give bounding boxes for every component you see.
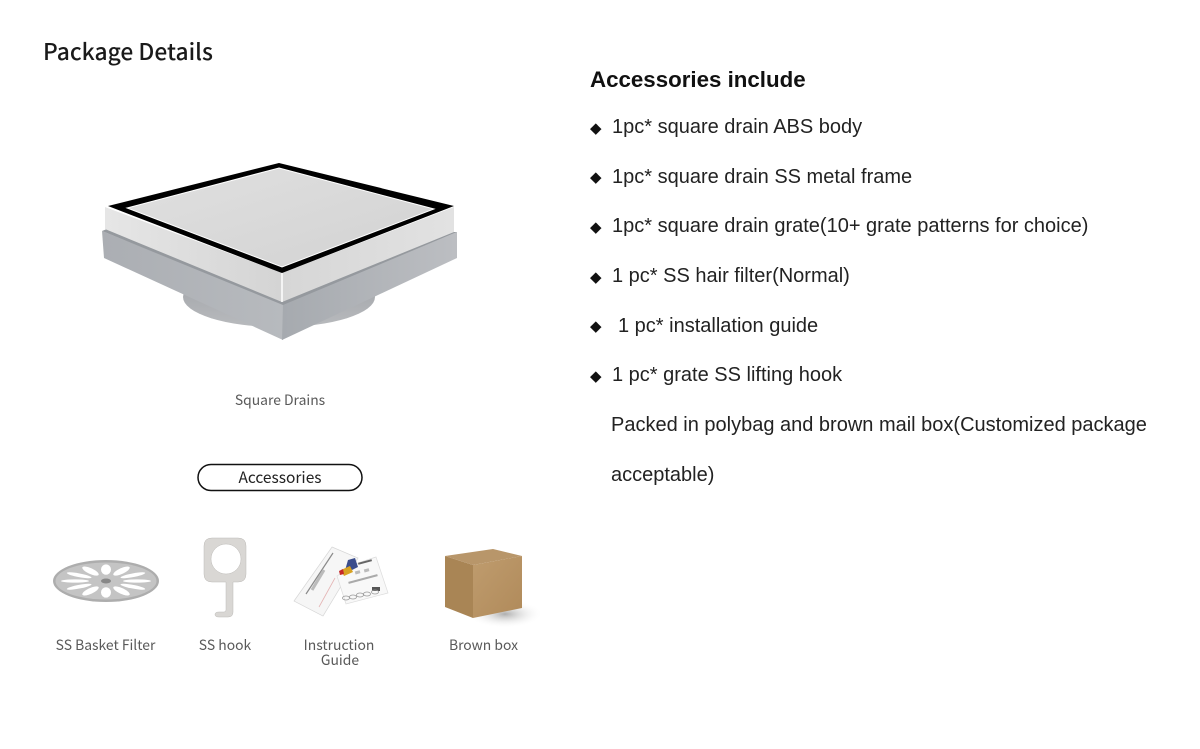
icon: SS hook <box>204 538 246 617</box>
list: accessories: ◆ <box>590 317 602 335</box>
list: accessories: 1 pc* SS hair filter(Normal) <box>612 265 850 287</box>
caption: SS basket filter: SS Basket Filter <box>56 635 156 655</box>
list: accessories: ◆ <box>590 119 602 137</box>
product image: square drain <box>102 163 457 340</box>
text block: packaging note: acceptable) <box>611 464 714 486</box>
list: accessories: 1 pc* grate SS lifting hook <box>612 364 843 386</box>
list: accessories: ◆ <box>590 218 602 236</box>
list: accessories: 1pc* square drain SS metal frame <box>612 166 912 188</box>
list: accessories: ◆ <box>590 168 602 186</box>
list: accessories: 1 pc* installation guide <box>618 315 818 337</box>
caption: instruction guide <box>304 635 374 670</box>
icon: brown box <box>445 549 543 628</box>
icon: SS basket filter <box>53 560 159 602</box>
accessories pill heading <box>198 464 362 490</box>
icon: instruction guide cards <box>294 547 388 616</box>
list: accessories: ◆ <box>590 367 602 385</box>
accessories pill heading: Accessories <box>238 466 322 488</box>
text block: packaging note <box>611 414 1147 486</box>
caption: SS hook: SS hook <box>199 635 252 655</box>
list: accessories: ◆ <box>590 268 602 286</box>
heading: accessories include: Accessories include <box>590 67 806 92</box>
list: accessories <box>590 116 1088 386</box>
caption: instruction guide: Guide <box>321 650 359 670</box>
text block: packaging note: Packed in polybag and brown mail box(Customized package <box>611 414 1147 436</box>
caption: square drains: Square Drains <box>235 390 325 410</box>
title: Package Details <box>43 34 213 67</box>
caption: instruction guide: Instruction <box>304 635 374 655</box>
list: accessories: 1pc* square drain ABS body <box>612 116 862 138</box>
list: accessories: 1pc* square drain grate(10+ grate patterns for choice) <box>612 215 1088 237</box>
caption: brown box: Brown box <box>449 635 518 655</box>
